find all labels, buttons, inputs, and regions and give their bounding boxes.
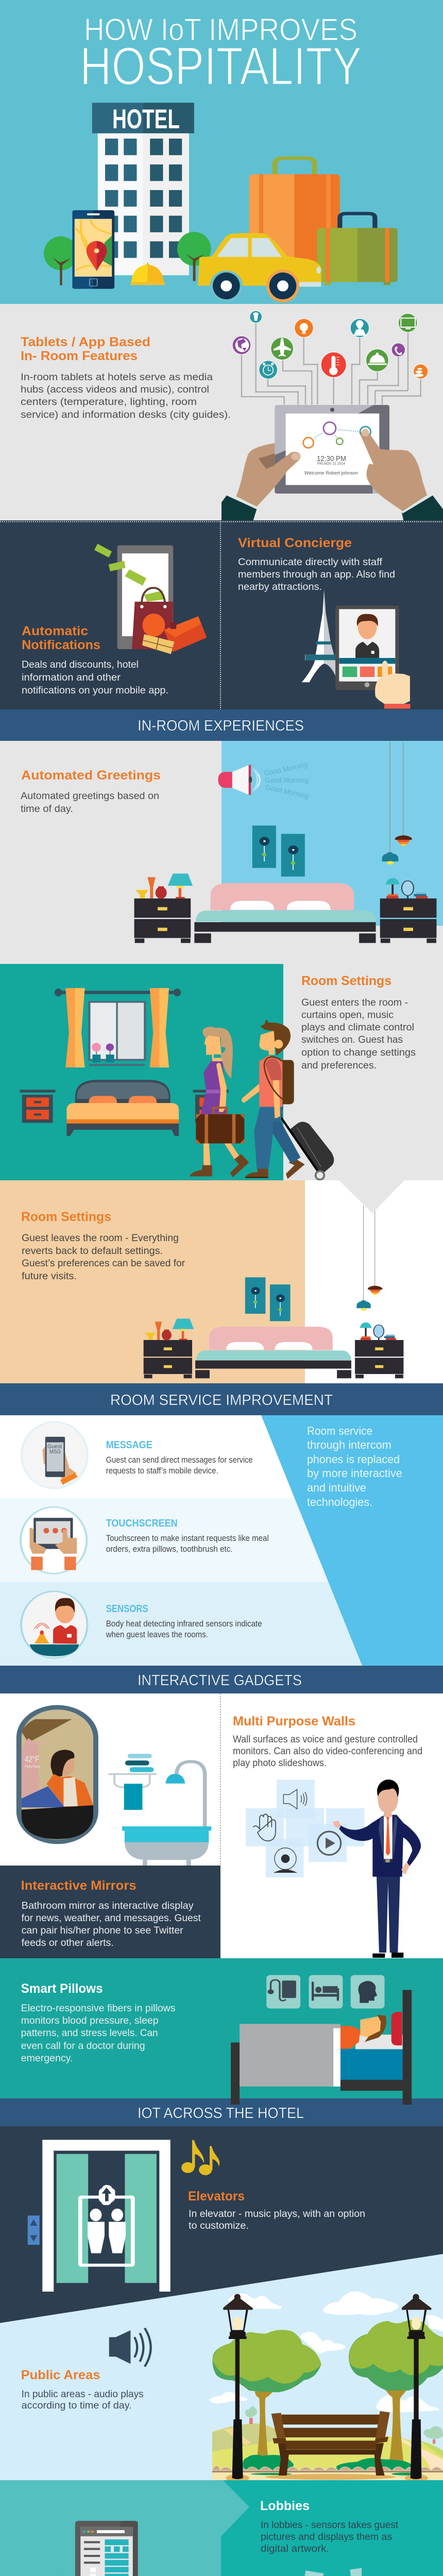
- heading: [21, 335, 150, 363]
- body text: patterns, and stress levels. Can: [21, 2028, 158, 2039]
- body text: [21, 372, 231, 420]
- panel: interactive mirrors text: Interactive Mirrors: [21, 1878, 137, 1893]
- icon glyphs: [235, 312, 423, 377]
- icon: speaker: [109, 2328, 151, 2367]
- banner: interactive gadgets: [0, 1666, 443, 1693]
- park scene: [210, 2291, 443, 2482]
- banner: iot across the hotel: [0, 2098, 443, 2126]
- body text: digital artwork.: [261, 2544, 329, 2554]
- illustration: phone with deals and shopping: [94, 544, 410, 709]
- item: touchscreen: orders, extra pillows, toothbrush etc.: [106, 1544, 233, 1554]
- item: sensors: when guest leaves the rooms.: [106, 1630, 208, 1639]
- blue panel: through intercom: [307, 1438, 391, 1451]
- illustration: bedroom: [144, 1206, 403, 1378]
- phone screen text: MSG: [49, 1449, 61, 1455]
- item: message: requests to staff’s mobile device.: [106, 1466, 218, 1476]
- icon circles: [232, 311, 428, 379]
- tablet clock text: Welcome Robert johnson: [304, 470, 358, 476]
- nightstands: [20, 1090, 229, 1123]
- banner: in-room experiences: IN-ROOM EXPERIENCES: [138, 718, 304, 734]
- illustration: presenter and wall controls: [246, 1780, 421, 1958]
- icon: music notes: [181, 2140, 219, 2175]
- multi purpose walls text: Multi Purpose Walls: [233, 1714, 355, 1728]
- hotel building: [92, 103, 194, 275]
- body text: Automated greetings based on: [21, 791, 159, 802]
- body text: option to change settings: [301, 1047, 416, 1058]
- pointer triangle: [339, 1180, 404, 1213]
- shopping bag: [132, 588, 173, 649]
- body text: In elevator - music plays, with an option: [189, 2209, 365, 2219]
- body text: time of day.: [21, 804, 73, 815]
- tablet clock text: [304, 454, 358, 476]
- tablet clock text: FRI,NOV 21 2014: [317, 462, 345, 466]
- body text: Guest enters the room -: [301, 997, 408, 1008]
- body text: monitors blood pressure, sleep: [21, 2015, 159, 2026]
- item: sensors: Body heat detecting infrared sensors indicate: [106, 1619, 262, 1629]
- illustration: connected tablet with service icons: [222, 311, 443, 520]
- item: message: Guest can send direct messages for service: [106, 1455, 253, 1465]
- man: [242, 1019, 305, 1179]
- panel: elevators: [0, 2126, 443, 2323]
- phone screen text: Guest: [47, 1444, 62, 1450]
- right hand: [361, 429, 443, 520]
- heading: In- Room Features: [21, 349, 138, 363]
- sleeping guest: [340, 2012, 403, 2049]
- illustration: hotel, phone, luggage and taxi: [44, 103, 398, 302]
- body text: curtains open, music: [301, 1010, 394, 1021]
- item: sensors: SENSORS: [106, 1603, 148, 1615]
- text: virtual concierge: [238, 557, 395, 592]
- icon tiles: [266, 1975, 385, 2009]
- hills: [212, 2406, 443, 2475]
- item: message: [106, 1439, 253, 1476]
- trees: [212, 2320, 443, 2462]
- body text: and preferences.: [301, 1060, 377, 1071]
- multi purpose walls text: play photo slideshows.: [233, 1758, 327, 1769]
- banner: room service improvement: [0, 1383, 443, 1415]
- concierge tablet: [335, 605, 399, 690]
- body text: [261, 2520, 399, 2554]
- small suitcase: [317, 213, 398, 285]
- rolling suitcase: [276, 1112, 334, 1180]
- envelope: [164, 616, 207, 652]
- heading: Smart Pillows: [21, 1981, 103, 1996]
- body text: [22, 2389, 144, 2411]
- text: virtual concierge: nearby attractions.: [238, 582, 322, 592]
- icon: touchscreen: [21, 1507, 87, 1573]
- interactive mirror: [16, 1705, 98, 1844]
- icon: speaker: [283, 1789, 307, 1809]
- tablet clock text: 12:30 PM: [317, 454, 346, 463]
- body text: service) and information desks (city guides).: [21, 410, 231, 420]
- body text: to customize.: [189, 2221, 249, 2231]
- icon: message phone: [22, 1422, 88, 1488]
- panel: interactive gadgets: [0, 1693, 443, 1958]
- dotted connectors: [242, 324, 421, 404]
- title: [80, 12, 362, 96]
- icon: hand: [253, 1814, 276, 1841]
- panel: interactive mirrors text: Bathroom mirror as interactive display: [22, 1901, 194, 1911]
- icon: bed: [312, 1981, 339, 2001]
- blue panel: by more interactive: [307, 1467, 402, 1480]
- illustration: monitoring icons and bed: [231, 1975, 412, 2105]
- item: touchscreen: TOUCHSCREEN: [106, 1518, 178, 1529]
- panel: interactive mirrors text: feeds or other alerts.: [22, 1938, 114, 1948]
- panel: smart pillows: [0, 1958, 443, 2105]
- eiffel tower: [302, 589, 336, 682]
- bed: [231, 1990, 412, 2105]
- heading: virtual concierge: Virtual Concierge: [238, 536, 352, 550]
- icon: head: [358, 1981, 377, 2003]
- multi purpose walls text: [233, 1714, 422, 1769]
- body text: [21, 2003, 176, 2064]
- blue panel: and intuitive: [307, 1481, 366, 1494]
- pointing hand: [375, 660, 410, 709]
- cash: [57, 2575, 162, 2576]
- body text: centers (temperature, lighting, room: [21, 397, 197, 408]
- heading: Automated Greetings: [21, 768, 161, 783]
- text: automatic notifications: notifications on your mobile app.: [22, 685, 168, 696]
- body text: Electro-responsive fibers in pillows: [21, 2003, 176, 2014]
- trees: [44, 232, 211, 285]
- text: automatic notifications: Deals and discounts, hotel: [22, 659, 139, 670]
- bathtub and towels: [109, 1754, 211, 1867]
- illustration: camera and floating photos: [277, 2568, 379, 2576]
- body text: hubs (access videos and music), control: [21, 384, 209, 395]
- greeting text: Good Morning: [265, 776, 309, 784]
- heading: Tablets / App Based: [21, 335, 150, 349]
- illustration: guest room: [20, 988, 229, 1136]
- heading: Lobbies: [260, 2499, 310, 2513]
- title: HOW IoT IMPROVES: [84, 12, 357, 47]
- body text: [22, 1233, 185, 1282]
- icon: sensors: [21, 1591, 87, 1658]
- panel: interactive mirrors text: [0, 1866, 220, 1958]
- item: message: MESSAGE: [106, 1439, 152, 1451]
- heading: automatic notifications: Notifications: [22, 638, 100, 652]
- icon: megaphone: [218, 765, 260, 795]
- left hand: [222, 443, 300, 520]
- illustration: bedroom: [134, 742, 436, 943]
- phone with map: [72, 210, 114, 289]
- bench: [271, 2411, 390, 2476]
- banner: iot across the hotel: IOT ACROSS THE HOTEL: [138, 2105, 304, 2122]
- mirror display text: Today's Weather: [25, 1739, 49, 1745]
- flying cash: [94, 544, 164, 602]
- greeting text: Good Morning: [263, 760, 309, 777]
- body text: future visits.: [22, 1271, 77, 1282]
- mirror display text: [25, 1739, 49, 1769]
- text: virtual concierge: members through an app. Also find: [238, 569, 395, 580]
- body text: plays and climate control: [301, 1022, 414, 1033]
- body text: Guest leaves the room - Everything: [22, 1233, 179, 1244]
- panel: notifications and concierge: [0, 520, 443, 709]
- guests with luggage: [190, 1019, 334, 1180]
- floating photos: [277, 2568, 379, 2576]
- banner: interactive gadgets: INTERACTIVE GADGETS: [138, 1672, 302, 1689]
- panel: interactive mirrors text: for news, weather, and messages. Guest: [22, 1913, 201, 1924]
- body text: according to time of day.: [22, 2400, 132, 2411]
- multi purpose walls text: Wall surfaces as voice and gesture controlled: [233, 1734, 418, 1745]
- presenter: [333, 1780, 421, 1958]
- body text: [301, 997, 416, 1071]
- illustration: tablet and money: [38, 2521, 162, 2576]
- large suitcase: [249, 158, 340, 277]
- panel: room settings on entry: [0, 964, 443, 1180]
- icon: play: [317, 1832, 341, 1855]
- mirror display text: 42°F: [25, 1754, 39, 1764]
- body text: reverts back to default settings.: [22, 1246, 163, 1257]
- heading: automatic notifications: Automatic: [22, 624, 88, 638]
- panel: restaurants: [0, 2480, 249, 2576]
- taxi: [198, 233, 321, 302]
- blue panel: phones is replaced: [307, 1453, 400, 1466]
- panel: public areas: [0, 2254, 443, 2482]
- heading: Room Settings: [21, 1210, 111, 1224]
- shrubs and fence: [212, 2455, 443, 2482]
- heading: automatic notifications: [22, 624, 100, 652]
- panel: room settings on exit: [0, 1180, 443, 1383]
- body text: emergency.: [21, 2053, 73, 2064]
- heading: Elevators: [188, 2189, 245, 2204]
- multi purpose walls text: monitors. Can also do video-conferencing and: [233, 1746, 422, 1757]
- panel: lobbies: [221, 2480, 443, 2576]
- panel: automated greetings: [0, 741, 443, 964]
- icon: webcam: [274, 1848, 297, 1873]
- body text: In lobbies - sensors takes guest: [261, 2520, 399, 2531]
- body text: In-room tablets at hotels serve as media: [21, 372, 213, 383]
- body text: switches on. Guest has: [301, 1035, 403, 1045]
- text: automatic notifications: [22, 659, 168, 696]
- woman: [190, 1027, 249, 1177]
- lampposts: [223, 2294, 431, 2479]
- panel: room service improvement: [0, 1415, 443, 1666]
- blue panel: technologies.: [307, 1496, 372, 1509]
- body text: pictures and displays them as: [261, 2532, 392, 2543]
- text: virtual concierge: Communicate directly with staff: [238, 557, 383, 568]
- panel: interactive mirrors text: can pair his/her phone to see Twitter: [22, 1925, 183, 1936]
- control tiles: [246, 1780, 364, 1877]
- hotel sign text: HOTEL: [112, 104, 180, 134]
- body text: In public areas - audio plays: [22, 2389, 144, 2400]
- greeting text: Good Morning: [264, 783, 310, 800]
- banner: room service improvement: ROOM SERVICE IMPROVEMENT: [110, 1392, 333, 1409]
- clouds: [210, 2291, 443, 2412]
- service bell: [130, 262, 165, 285]
- greeting text: [263, 760, 310, 800]
- body text: [21, 791, 159, 815]
- blue panel: Room service: [307, 1425, 372, 1437]
- text: automatic notifications: information and other: [22, 672, 121, 683]
- body text: even call for a doctor during: [21, 2041, 145, 2052]
- body text: Guest’s preferences can be saved for: [22, 1258, 185, 1269]
- panel: hero: [0, 0, 443, 304]
- mirror display text: Partly Rainy: [25, 1765, 40, 1769]
- banner: in-room experiences: [0, 709, 443, 741]
- panel: tablets and app based in-room features: [0, 304, 443, 521]
- illustration: elevator: [28, 2140, 171, 2292]
- heading: Public Areas: [21, 2368, 100, 2382]
- phone screen text: [47, 1444, 62, 1455]
- icon: blood pressure: [267, 1980, 296, 2001]
- body text: [189, 2209, 365, 2231]
- heading: Room Settings: [301, 974, 391, 988]
- window and curtains: [55, 988, 181, 1067]
- gift: [142, 634, 174, 654]
- item: sensors: [106, 1603, 262, 1639]
- bed: [66, 1080, 179, 1136]
- item: touchscreen: [106, 1518, 269, 1554]
- tablet: [275, 405, 389, 494]
- item: touchscreen: Touchscreen to make instant requests like meal: [106, 1533, 269, 1543]
- title: HOSPITALITY: [80, 37, 362, 96]
- blue panel: [261, 1415, 443, 1666]
